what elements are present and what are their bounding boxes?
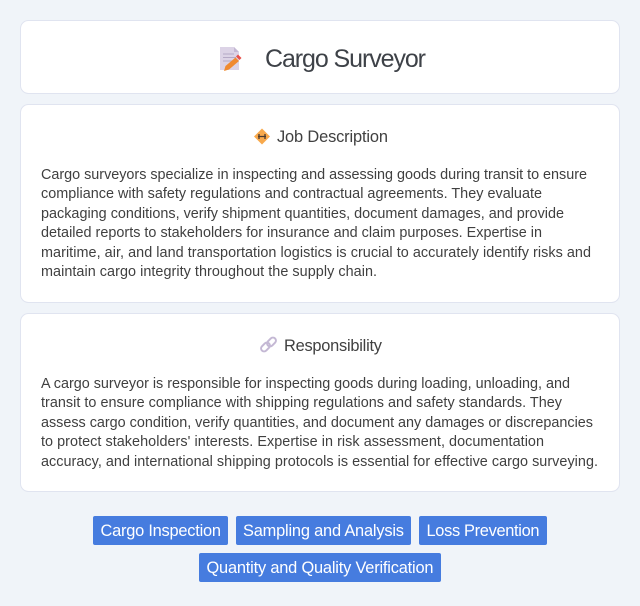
- panel: responsibility: [20, 314, 620, 492]
- text block: responsibility: [41, 376, 598, 470]
- text block: job description: maritime, air, and land transportation logistics is crucial to accurately identify risks and: [41, 245, 591, 261]
- heading: responsibility: Responsibility: [284, 337, 383, 355]
- tag: sampling and analysis: Sampling and Analysis: [243, 522, 404, 540]
- icon: chain link: [260, 336, 277, 353]
- text block: job description: [41, 167, 591, 280]
- text block: job description: packaging conditions, verify shipment quantities, document damages, and provide: [41, 206, 564, 222]
- text block: job description: detailed reports to stakeholders for insurance and claim purposes. Expertise in: [41, 225, 542, 241]
- text block: job description: Cargo surveyors specialize in inspecting and assessing goods during transit to ensure: [41, 167, 587, 183]
- panel: header: [20, 20, 620, 94]
- tags: [93, 516, 547, 582]
- text block: responsibility: to protect stakeholders' interests. Expertise in risk assessment, documentation: [41, 434, 544, 450]
- panel: job description: [20, 104, 620, 302]
- tag: loss prevention: Loss Prevention: [426, 522, 540, 540]
- tag: sampling and analysis: [236, 516, 411, 545]
- text block: responsibility: A cargo surveyor is responsible for inspecting goods during loading, unloading, and: [41, 376, 570, 392]
- text block: job description: maintain cargo integrity throughout the supply chain.: [41, 264, 377, 280]
- heading: job description: Job Description: [277, 128, 388, 146]
- tag: cargo inspection: Cargo Inspection: [100, 522, 221, 540]
- tag: quantity and quality verification: [199, 553, 441, 582]
- tag: quantity and quality verification: Quantity and Quality Verification: [206, 559, 434, 577]
- icon: road sign diamond: [254, 128, 270, 144]
- tag: loss prevention: [419, 516, 547, 545]
- tag: cargo inspection: [93, 516, 228, 545]
- text block: responsibility: accuracy, and international shipping protocols is essential for effective cargo surveying.: [41, 454, 598, 470]
- text block: responsibility: transit to ensure compliance with shipping regulations and safety standards. They: [41, 395, 563, 411]
- text block: responsibility: assess cargo condition, verify quantities, and document any damages or discrepancies: [41, 415, 593, 431]
- icon: document with pencil: [220, 47, 242, 71]
- text block: job description: compliance with safety regulations and contractual agreements. They evaluate: [41, 186, 542, 202]
- title: Cargo Surveyor: [265, 45, 426, 73]
